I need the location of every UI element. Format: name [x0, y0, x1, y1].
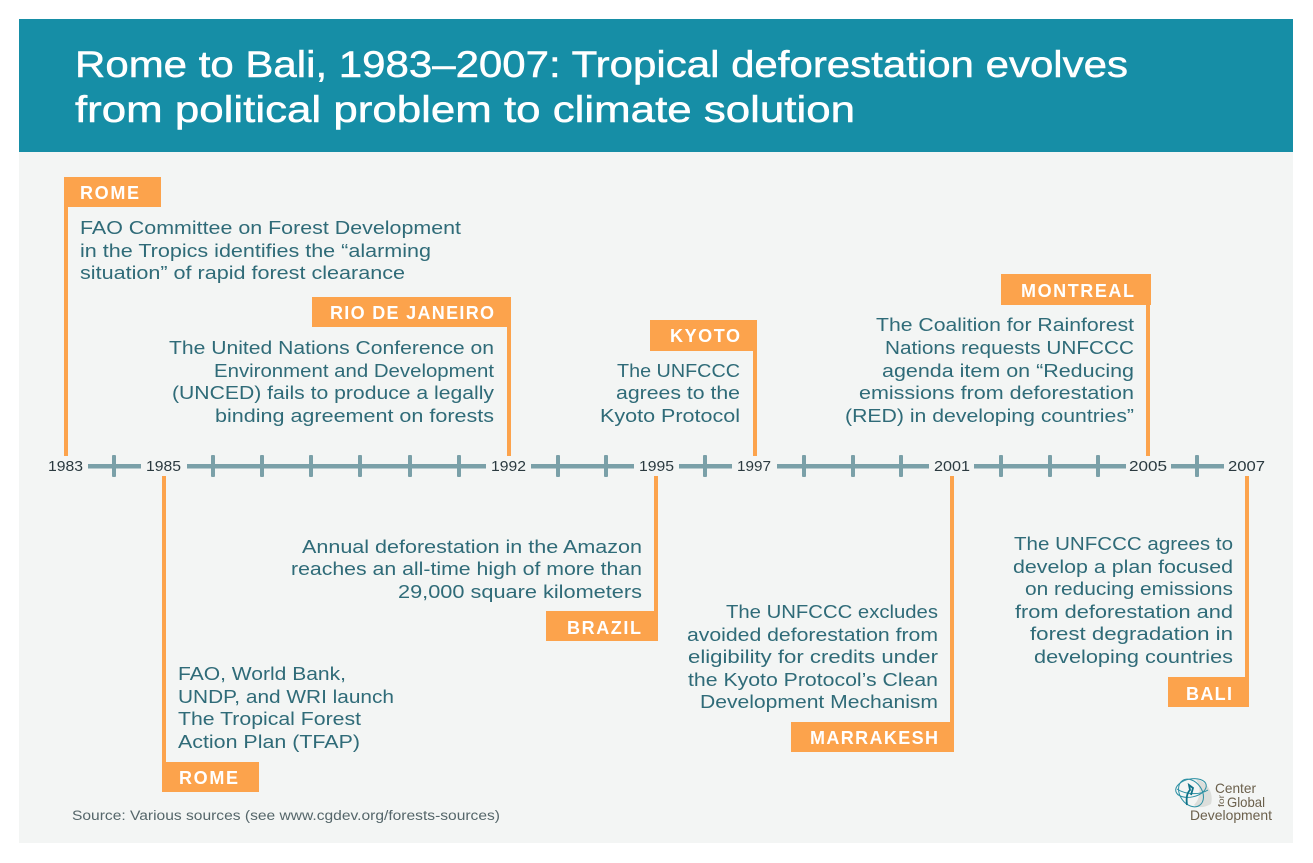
- event: Rio de Janeiro 1992: The United Nations Conference on: [169, 337, 494, 358]
- event: Rome 1985: [162, 476, 394, 792]
- event: Kyoto 1997: The UNFCCC: [617, 360, 740, 381]
- event: Bali 2007: [1013, 476, 1249, 707]
- event: Rome 1983: in the Tropics identifies the “alarming: [80, 240, 431, 261]
- year labels: 1995: [639, 458, 674, 475]
- event: Kyoto 1997: Kyoto Protocol: [600, 405, 740, 426]
- icon: globe: [1173, 774, 1212, 812]
- title: from political problem to climate solution: [75, 89, 855, 130]
- logo: Center for Global Development: Global: [1227, 794, 1265, 810]
- event: Rome 1985: ROME: [179, 768, 238, 788]
- event: Montreal 2005: MONTREAL: [1021, 281, 1134, 301]
- event: Rome 1983: [64, 177, 461, 456]
- event: Marrakesh 2001: eligibility for credits under: [688, 646, 938, 667]
- event: Rome 1985: UNDP, and WRI launch: [178, 686, 394, 707]
- event: Montreal 2005: agenda item on “Reducing: [882, 360, 1134, 381]
- timeline axis: [48, 455, 1265, 477]
- event: Montreal 2005: [845, 274, 1151, 456]
- event: Rome 1983: situation” of rapid forest clearance: [80, 262, 405, 283]
- event: Marrakesh 2001: avoided deforestation from: [687, 624, 938, 645]
- logo: Center for Global Development: Center: [1215, 780, 1256, 796]
- event: Rome 1983: FAO Committee on Forest Development: [80, 217, 461, 238]
- year labels: 1992: [491, 458, 526, 475]
- event: Rio de Janeiro 1992: Environment and Development: [214, 360, 494, 381]
- event: Montreal 2005: (RED) in developing countries”: [845, 405, 1134, 426]
- event: Rome 1985: FAO, World Bank,: [178, 663, 346, 684]
- event: Marrakesh 2001: the Kyoto Protocol’s Clean: [688, 669, 938, 690]
- year labels: 2005: [1129, 458, 1167, 475]
- event: Marrakesh 2001: The UNFCCC excludes: [726, 601, 938, 622]
- title: [75, 44, 1128, 130]
- year labels: 1985: [146, 458, 181, 475]
- event: Bali 2007: forest degradation in: [1030, 623, 1233, 644]
- event: Montreal 2005: The Coalition for Rainforest: [876, 314, 1134, 335]
- event: Marrakesh 2001: [687, 476, 954, 752]
- event: Marrakesh 2001: Development Mechanism: [700, 691, 938, 712]
- event: Bali 2007: from deforestation and: [1015, 601, 1233, 622]
- year labels: 2007: [1228, 458, 1265, 475]
- event: Rome 1985: Action Plan (TFAP): [178, 731, 360, 752]
- event: Rome 1985: The Tropical Forest: [178, 708, 361, 729]
- event: Kyoto 1997: agrees to the: [616, 382, 740, 403]
- title: Rome to Bali, 1983–2007: Tropical deforestation evolves: [75, 44, 1128, 85]
- year labels: 2001: [934, 458, 970, 475]
- event: Montreal 2005: emissions from deforestation: [859, 382, 1134, 403]
- event: Rio de Janeiro 1992: (UNCED) fails to produce a legally: [172, 382, 495, 403]
- logo: Center for Global Development: [1173, 774, 1272, 823]
- event: Bali 2007: developing countries: [1034, 646, 1233, 667]
- event: Brazil 1995: reaches an all-time high of more than: [291, 558, 642, 579]
- event: Bali 2007: The UNFCCC agrees to: [1014, 533, 1233, 554]
- event: Bali 2007: BALI: [1186, 684, 1232, 704]
- source note: Source: Various sources (see www.cgdev.org/forests-sources): [72, 808, 500, 823]
- year labels: 1997: [737, 458, 771, 475]
- title banner: [19, 19, 1293, 152]
- event: Marrakesh 2001: MARRAKESH: [810, 728, 938, 748]
- logo: Center for Global Development: Development: [1190, 807, 1272, 823]
- event: Kyoto 1997: [600, 320, 757, 456]
- event: Brazil 1995: BRAZIL: [567, 618, 641, 638]
- event: Brazil 1995: [291, 476, 658, 641]
- year labels: 1983: [48, 458, 83, 475]
- event: Montreal 2005: Nations requests UNFCCC: [885, 337, 1134, 358]
- event: Rio de Janeiro 1992: binding agreement on forests: [215, 405, 494, 426]
- year labels: [48, 458, 1265, 475]
- event: Brazil 1995: 29,000 square kilometers: [398, 581, 642, 602]
- event: Rio de Janeiro 1992: [169, 297, 511, 456]
- event: Brazil 1995: Annual deforestation in the Amazon: [302, 536, 642, 557]
- event: Rome 1983: ROME: [80, 183, 139, 203]
- event: Bali 2007: on reducing emissions: [1025, 578, 1233, 599]
- event: Rio de Janeiro 1992: RIO DE JANEIRO: [330, 303, 494, 323]
- event: Kyoto 1997: KYOTO: [670, 326, 740, 346]
- logo: Center for Global Development: for: [1217, 795, 1226, 807]
- event: Bali 2007: develop a plan focused: [1013, 556, 1233, 577]
